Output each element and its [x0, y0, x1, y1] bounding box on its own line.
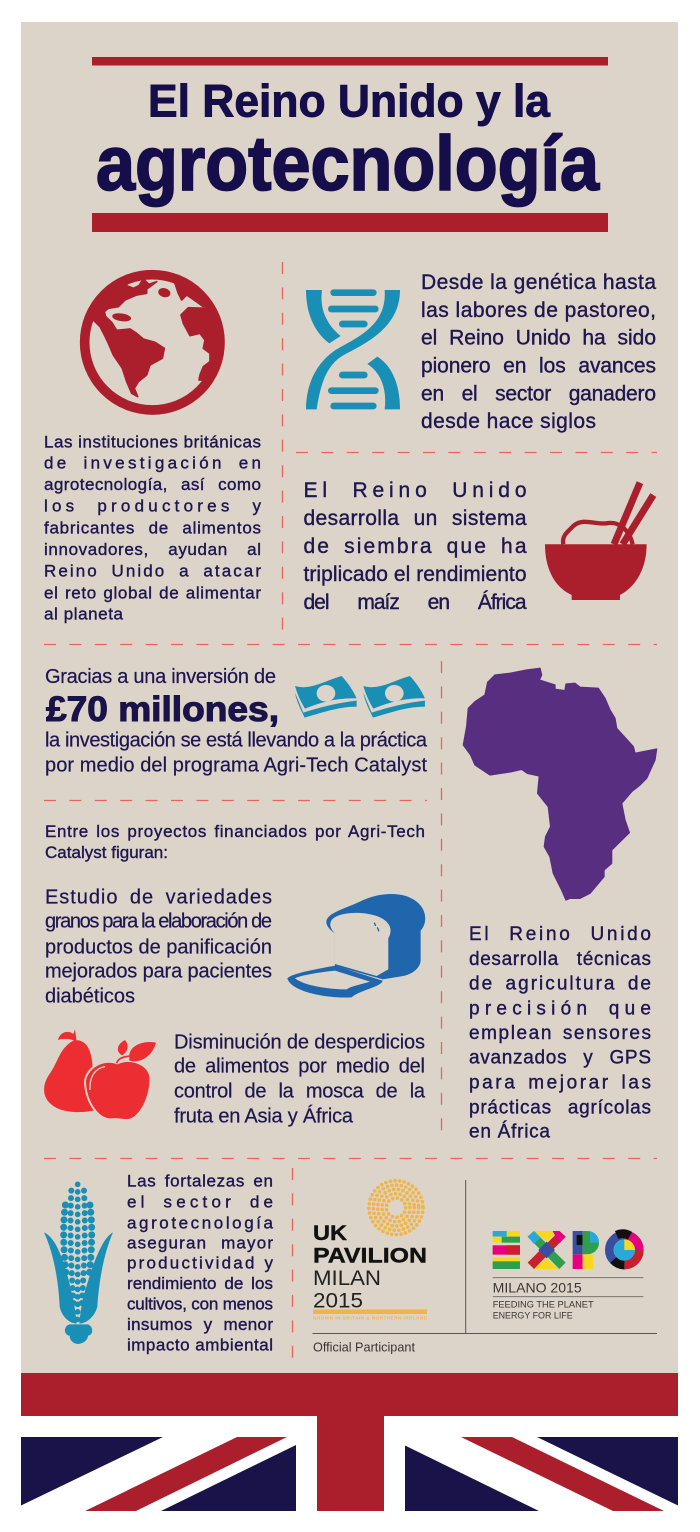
- text: agricultura de precisión: emplean sensores: [469, 1023, 651, 1044]
- icon: globe: [85, 275, 220, 410]
- text: fortalezas: aseguran mayor: [127, 1233, 273, 1252]
- logo: Expo Milano 2015: FEEDING THE PLANET: [493, 1300, 594, 1311]
- text: genética: pionero en los avances: [421, 355, 656, 378]
- text: instituciones británicas: Las instituciones británicas: [44, 432, 261, 451]
- text: agricultura de precisión: El Reino Unido: [469, 924, 651, 945]
- title block: [92, 57, 608, 232]
- icon: pear and apple: [44, 1029, 156, 1120]
- text: agricultura de precisión: precisión que: [469, 998, 651, 1019]
- text: estudio de variedades: granos para la elaboración de: [45, 911, 272, 933]
- text: agricultura de precisión: prácticas agrícolas: [469, 1097, 651, 1118]
- logo: UK Pavilion: [313, 1181, 428, 1320]
- text: proyectos financiados: Entre los proyectos financiados por Agri-Tech: [45, 822, 425, 841]
- logo: UK Pavilion: PAVILION: [313, 1245, 427, 1268]
- text: agricultura de precisión: de agricultura de: [469, 974, 651, 995]
- text: desperdicios: de alimentos por medio del: [174, 1056, 425, 1078]
- text: sistema de siembra: triplicado el rendimiento: [304, 563, 526, 586]
- text: proyectos financiados: [45, 822, 425, 862]
- flag: Union Jack footer: [21, 1373, 678, 1511]
- text: sistema de siembra: de siembra que ha: [304, 535, 527, 558]
- text: desperdicios: Disminución de desperdicios: [174, 1031, 425, 1053]
- text: instituciones británicas: de investigación en: [44, 454, 261, 473]
- text: inversión: por medio del programa Agri-Tech Catalyst: [45, 755, 427, 777]
- text: instituciones británicas: Reino Unido a atacar: [44, 562, 261, 581]
- icon: corn: [44, 1184, 113, 1344]
- text: fortalezas: productividad y: [127, 1253, 274, 1272]
- text: sistema de siembra: desarrolla un sistema: [304, 507, 527, 530]
- text: genética: el Reino Unido ha sido: [421, 327, 656, 350]
- logo: UK Pavilion: 2015: [313, 1289, 363, 1312]
- text: fortalezas: el sector de: [127, 1193, 273, 1212]
- text: fortalezas: rendimiento de los: [127, 1274, 273, 1293]
- text: official participant: Official Participant: [313, 1341, 416, 1355]
- icon: bread: [287, 894, 425, 998]
- text: desperdicios: [174, 1031, 426, 1127]
- text: fortalezas: impacto ambiental: [127, 1335, 273, 1354]
- text: estudio de variedades: mejorados para pacientes: [45, 961, 272, 983]
- text: agricultura de precisión: [469, 924, 651, 1143]
- icon: DNA: [306, 290, 400, 409]
- text: instituciones británicas: fabricantes de alimentos: [44, 518, 261, 537]
- logo: UK Pavilion: UK: [313, 1222, 347, 1245]
- logo: Expo Milano 2015: [493, 1231, 644, 1321]
- text: fortalezas: agrotecnología: [127, 1213, 274, 1232]
- text: sistema de siembra: El Reino Unido: [304, 479, 526, 502]
- text: instituciones británicas: agrotecnología, así como: [44, 475, 261, 494]
- text: agricultura de precisión: en África: [469, 1122, 550, 1143]
- text: genética: las labores de pastoreo,: [421, 299, 656, 322]
- icon: banknotes: [295, 676, 425, 718]
- logo: UK Pavilion: GROWN IN BRITAIN & NORTHERN IRELAND: [313, 1316, 428, 1320]
- icon: Africa map: [463, 668, 657, 900]
- logo: UK Pavilion: MILAN: [313, 1267, 381, 1290]
- text: instituciones británicas: innovadores, ayudan al: [44, 540, 261, 559]
- text: fortalezas: cultivos, con menos: [127, 1294, 273, 1313]
- text: fortalezas: Las fortalezas en: [127, 1172, 273, 1191]
- text: estudio de variedades: [45, 886, 272, 1007]
- text: instituciones británicas: [44, 432, 262, 624]
- text: genética: [421, 271, 656, 433]
- text: fortalezas: [127, 1172, 274, 1354]
- text: genética: en el sector ganadero: [421, 383, 656, 406]
- title block: agrotecnología: [96, 121, 600, 207]
- text: estudio de variedades: productos de panificación: [45, 936, 272, 958]
- text: desperdicios: control de la mosca de la: [174, 1081, 426, 1103]
- text: agricultura de precisión: desarrolla técnicas: [469, 949, 651, 970]
- text: estudio de variedades: diabéticos: [45, 985, 135, 1007]
- text: instituciones británicas: al planeta: [44, 604, 124, 624]
- text: fortalezas: insumos y menor: [127, 1315, 273, 1334]
- text: instituciones británicas: los productores y: [44, 497, 262, 516]
- dividers: [312, 1180, 657, 1334]
- icon: sunflower: [369, 1181, 423, 1235]
- logo: Expo Milano 2015: ENERGY FOR LIFE: [493, 1310, 573, 1321]
- text: sistema de siembra: [304, 479, 527, 614]
- text: instituciones británicas: el reto global de alimentar: [44, 583, 261, 602]
- icon: rice bowl: [545, 483, 653, 600]
- text: inversión: £70 millones,: [46, 690, 279, 729]
- text: inversión: [45, 666, 428, 777]
- text: estudio de variedades: Estudio de variedades: [45, 886, 272, 908]
- title block: El Reino Unido y la: [148, 76, 551, 126]
- logo: Expo Milano 2015: MILANO 2015: [493, 1279, 582, 1295]
- text: proyectos financiados: Catalyst figuran:: [45, 843, 168, 862]
- text: agricultura de precisión: para mejorar las: [469, 1072, 651, 1093]
- text: sistema de siembra: del maíz en África: [304, 591, 527, 614]
- icon: expo wordmark: [493, 1231, 639, 1269]
- text: agricultura de precisión: avanzados y GPS: [469, 1047, 651, 1068]
- text: inversión: Gracias a una inversión de: [45, 666, 276, 688]
- text: desperdicios: fruta en Asia y África: [174, 1104, 354, 1127]
- text: genética: Desde la genética hasta: [421, 271, 656, 294]
- text: inversión: la investigación se está llevando a la práctica: [45, 730, 428, 752]
- text: genética: desde hace siglos: [421, 410, 596, 433]
